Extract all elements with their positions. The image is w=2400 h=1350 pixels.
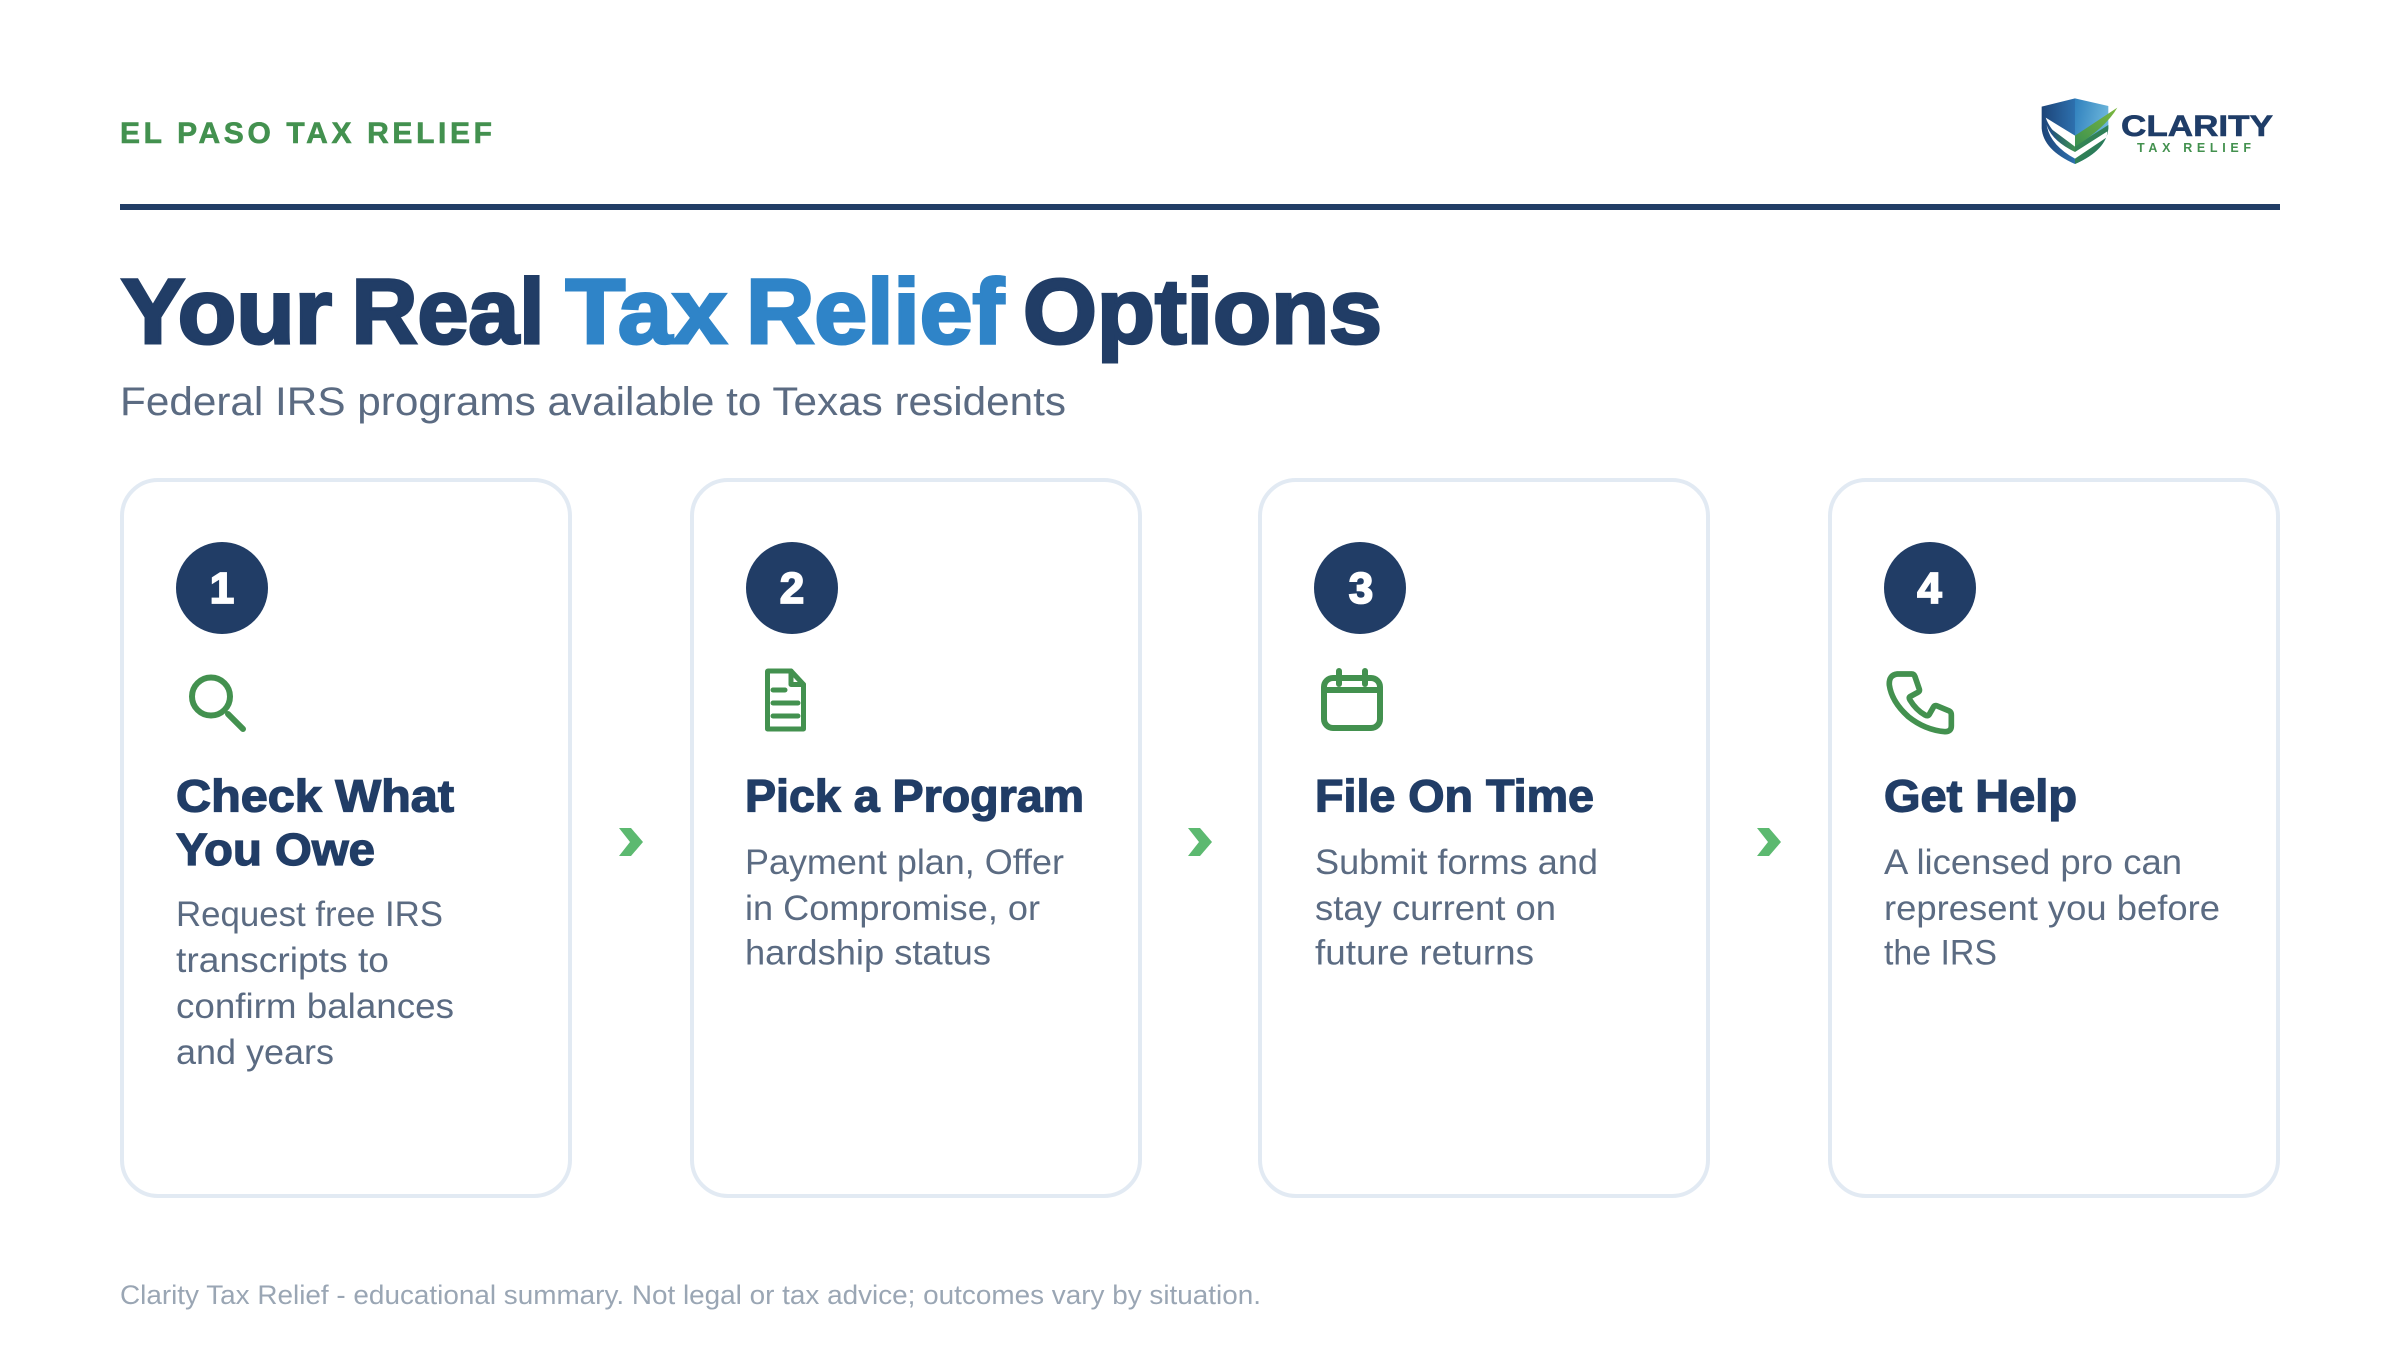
title: Tax — [566, 261, 726, 363]
heading: File On Time — [1315, 770, 1594, 822]
heading: Get Help — [1884, 770, 2077, 822]
description: stay current on — [1315, 889, 1556, 928]
description — [1884, 843, 2220, 972]
title: Options — [1023, 261, 1382, 363]
footer disclaimer: Clarity Tax Relief - educational summary. Not legal or tax advice; outcomes vary by situation. — [120, 1280, 1261, 1310]
title: Your — [121, 261, 332, 363]
heading — [176, 770, 454, 875]
arrow 1 — [619, 828, 643, 856]
step number 2: 2 — [780, 564, 804, 613]
icon: magnifier — [192, 678, 243, 729]
description: hardship status — [745, 934, 991, 972]
description — [1315, 843, 1598, 972]
panel: step 1 check what you owe — [122, 480, 570, 1196]
description: Submit forms and — [1315, 843, 1598, 882]
step number 1 — [176, 542, 268, 634]
description: transcripts to — [176, 941, 389, 980]
subtitle: Federal IRS programs available to Texas residents — [120, 380, 1066, 424]
panel: step 2 pick a program — [692, 480, 1140, 1196]
heading: Pick a Program — [745, 770, 1084, 822]
step number 3: 3 — [1349, 564, 1373, 613]
icon: document — [768, 671, 804, 729]
title: Real — [352, 261, 544, 363]
description: Request free IRS — [176, 895, 443, 934]
description: confirm balances — [176, 987, 454, 1026]
arrow 3 — [1757, 828, 1781, 856]
description: future returns — [1315, 934, 1534, 972]
logo: Clarity Tax Relief — [2042, 98, 2273, 164]
icon: shield with check — [2042, 98, 2117, 164]
icon: calendar — [1324, 671, 1380, 728]
step number 3 — [1314, 542, 1406, 634]
description: the IRS — [1884, 934, 1997, 972]
description: A licensed pro can — [1884, 843, 2182, 882]
heading: Check What — [176, 770, 454, 822]
step number 4 — [1884, 542, 1976, 634]
icon: phone — [1889, 674, 1951, 732]
heading: You Owe — [176, 824, 375, 875]
header rule — [120, 204, 2280, 210]
logo tagline: TAX RELIEF — [2137, 141, 2251, 155]
panel: step 4 get help — [1830, 480, 2278, 1196]
arrow 2 — [1188, 828, 1212, 856]
description — [745, 843, 1064, 972]
description: in Compromise, or — [745, 889, 1040, 928]
step number 4: 4 — [1917, 564, 1942, 613]
step number 1: 1 — [210, 564, 234, 613]
eyebrow label: El Paso Tax Relief: EL PASO TAX RELIEF — [120, 117, 492, 150]
logo wordmark: CLARITY — [2121, 110, 2273, 143]
description: Payment plan, Offer — [745, 843, 1064, 882]
title: Relief — [746, 261, 1004, 363]
description: represent you before — [1884, 889, 2220, 928]
panel: step 3 file on time — [1260, 480, 1708, 1196]
description: and years — [176, 1033, 334, 1072]
title — [121, 261, 1382, 363]
description — [176, 895, 454, 1072]
step number 2 — [746, 542, 838, 634]
